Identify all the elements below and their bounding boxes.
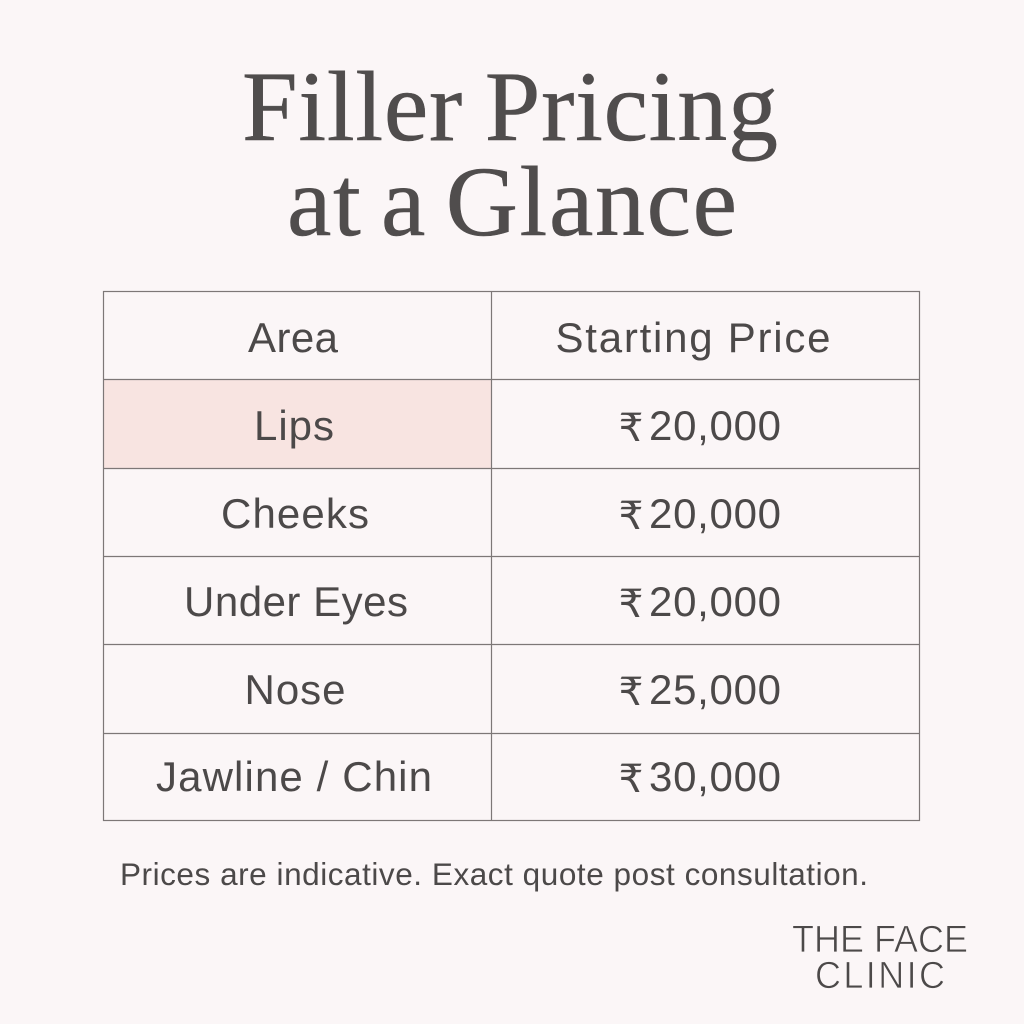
row: Nose: 25,000 bbox=[649, 666, 781, 713]
pricing table bbox=[104, 292, 920, 820]
row: Lips bbox=[254, 402, 781, 451]
highlighted row background: Lips bbox=[104, 380, 491, 468]
row: Cheeks: Cheeks bbox=[221, 490, 369, 537]
header row: Area bbox=[248, 314, 339, 361]
row: Under Eyes: Under Eyes bbox=[184, 578, 408, 625]
row: Jawline / Chin: Jawline / Chin bbox=[156, 753, 432, 800]
row: Nose bbox=[244, 666, 781, 715]
row: Nose: Nose bbox=[244, 666, 346, 713]
row: Cheeks: 20,000 bbox=[649, 490, 781, 537]
header row: Starting Price bbox=[556, 314, 830, 361]
footnote: Prices are indicative. Exact quote post consultation. bbox=[120, 856, 868, 892]
row: Cheeks: ₹ bbox=[619, 494, 643, 539]
row: Under Eyes bbox=[184, 578, 781, 627]
logo: The Face Clinic: THE FACE bbox=[792, 917, 968, 960]
row: Under Eyes: 20,000 bbox=[649, 578, 781, 625]
row: Jawline / Chin bbox=[156, 753, 781, 802]
row: Nose: ₹ bbox=[619, 670, 643, 715]
logo: The Face Clinic bbox=[792, 917, 968, 996]
row: Lips: ₹ bbox=[619, 406, 643, 451]
logo: The Face Clinic: CLINIC bbox=[815, 953, 945, 996]
row: Lips: Lips bbox=[254, 402, 334, 449]
row: Lips: 20,000 bbox=[649, 402, 781, 449]
row: Under Eyes: ₹ bbox=[619, 582, 643, 627]
header row bbox=[248, 314, 830, 361]
title: at a Glance bbox=[287, 146, 737, 257]
title bbox=[242, 51, 778, 257]
title: Filler Pricing bbox=[242, 51, 778, 162]
row: Jawline / Chin: 30,000 bbox=[649, 753, 781, 800]
row: Cheeks bbox=[221, 490, 781, 539]
row: Jawline / Chin: ₹ bbox=[619, 757, 643, 802]
